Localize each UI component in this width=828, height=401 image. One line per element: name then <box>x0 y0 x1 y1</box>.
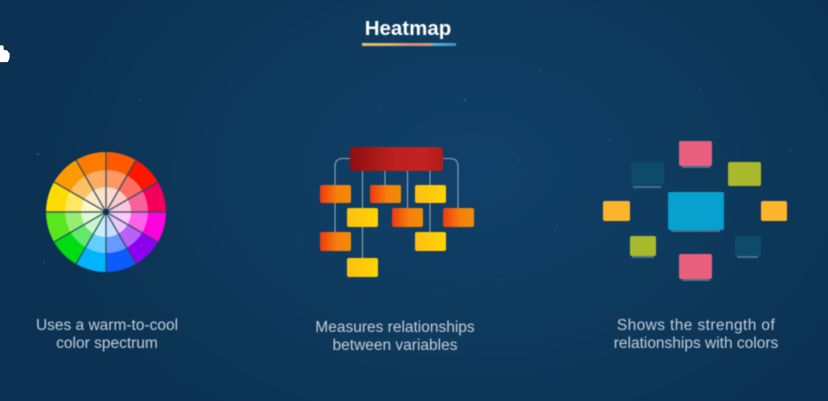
caption: color wheel: color spectrum <box>56 335 158 352</box>
block: right yellow <box>760 200 787 220</box>
panel: relationship blocks <box>602 140 788 282</box>
box <box>442 208 474 226</box>
caption: relationship blocks: Shows the strength of <box>617 317 775 334</box>
caption: hierarchy diagram <box>315 319 475 354</box>
color wheel spokes <box>46 151 167 273</box>
color wheel outer ring <box>46 152 166 272</box>
block: upper right green <box>728 162 761 186</box>
box <box>392 208 423 226</box>
block: bottom pink <box>679 254 712 278</box>
caption: relationship blocks <box>614 317 778 352</box>
block: top pink <box>679 141 712 166</box>
panel: hierarchy diagram <box>319 146 475 278</box>
block: upper left teal <box>630 162 664 185</box>
title underline <box>362 42 456 46</box>
box <box>347 258 378 276</box>
color wheel middle ring <box>64 170 148 253</box>
icon: hand cursor <box>0 44 10 63</box>
block: center blue <box>668 192 724 230</box>
box <box>320 232 350 251</box>
box <box>415 232 446 251</box>
box <box>370 185 400 203</box>
box <box>415 185 446 203</box>
top box <box>350 147 443 171</box>
caption: hierarchy diagram: Measures relationships <box>315 319 475 336</box>
caption: color wheel <box>36 317 178 352</box>
box <box>347 208 378 226</box>
color wheel inner ring <box>81 186 131 236</box>
caption: relationship blocks: relationships with colors <box>614 335 778 352</box>
caption: hierarchy diagram: between variables <box>333 337 457 354</box>
box <box>320 185 350 203</box>
title: Heatmap <box>365 17 451 40</box>
caption: color wheel: Uses a warm-to-cool <box>36 317 178 334</box>
block: lower right teal <box>734 236 760 256</box>
panel: color wheel <box>45 151 167 273</box>
connector lines <box>334 157 460 258</box>
block: lower left green <box>630 236 656 256</box>
block: left yellow <box>603 200 630 220</box>
